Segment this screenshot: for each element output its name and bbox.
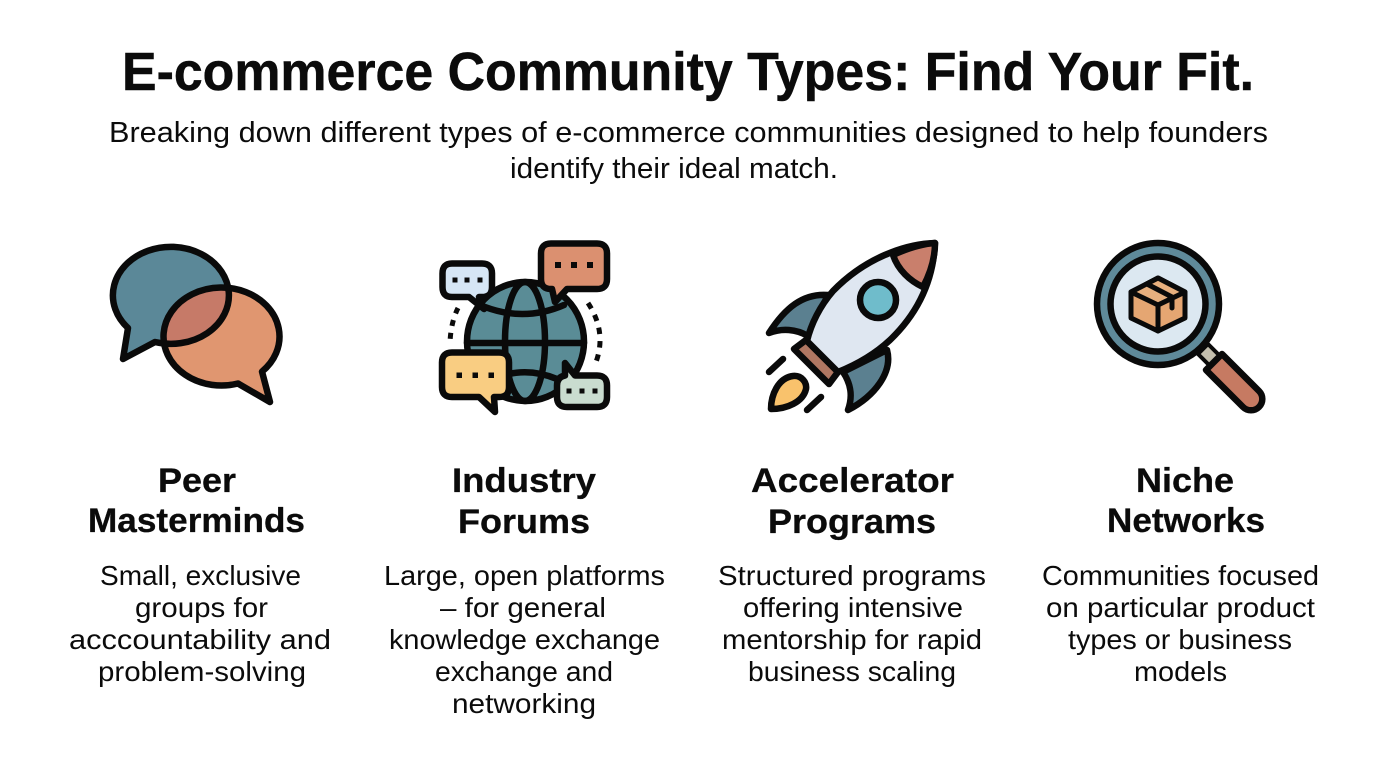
heading: peer masterminds: Masterminds <box>88 502 305 540</box>
panel: niche networks <box>1042 243 1319 687</box>
description: niche networks: models <box>1134 656 1227 687</box>
panel: industry forums <box>384 244 665 719</box>
heading: niche networks <box>1107 462 1265 540</box>
heading: accelerator programs <box>751 462 954 541</box>
heading: niche networks: Niche <box>1136 462 1234 500</box>
description: niche networks <box>1042 560 1319 687</box>
description: industry forums <box>384 560 665 719</box>
description: peer masterminds: Small, exclusive <box>100 560 301 591</box>
heading: peer masterminds: Peer <box>158 462 236 500</box>
description: accelerator programs: offering intensive <box>743 592 963 623</box>
panel: peer masterminds <box>69 247 331 687</box>
description: peer masterminds: groups for <box>135 592 268 623</box>
description: industry forums: knowledge exchange <box>389 624 660 655</box>
description: niche networks: types or business <box>1068 624 1292 655</box>
description: industry forums: – for general <box>440 592 606 623</box>
description: accelerator programs <box>718 560 986 687</box>
description: industry forums: networking <box>452 688 596 719</box>
heading: accelerator programs: Programs <box>768 503 936 541</box>
title: E-commerce Community Types: Find Your Fit. <box>122 42 1254 102</box>
subtitle: identify their ideal match. <box>510 153 838 185</box>
description: accelerator programs: business scaling <box>748 656 956 687</box>
subtitle: Breaking down different types of e-commerce communities designed to help founders <box>109 117 1268 149</box>
icon: rocket <box>769 243 935 410</box>
heading: industry forums: Forums <box>458 503 590 541</box>
panel: accelerator programs <box>718 243 986 687</box>
description: accelerator programs: Structured programs <box>718 560 986 591</box>
icon: magnifying glass with box <box>1097 243 1262 410</box>
heading: peer masterminds <box>88 462 305 540</box>
description: accelerator programs: mentorship for rapid <box>722 624 982 655</box>
subtitle <box>109 117 1268 185</box>
heading: niche networks: Networks <box>1107 502 1265 540</box>
icon: globe with chat bubbles <box>442 244 607 412</box>
heading: industry forums <box>452 462 596 541</box>
description: industry forums: exchange and <box>435 656 613 687</box>
description: industry forums: Large, open platforms <box>384 560 665 591</box>
heading: industry forums: Industry <box>452 462 596 500</box>
icon: overlapping speech bubbles <box>113 247 279 402</box>
description: niche networks: Communities focused <box>1042 560 1319 591</box>
description: peer masterminds: acccountability and <box>69 624 331 655</box>
description: peer masterminds: problem-solving <box>98 656 306 687</box>
description: niche networks: on particular product <box>1046 592 1315 623</box>
heading: accelerator programs: Accelerator <box>751 462 954 500</box>
description: peer masterminds <box>69 560 331 687</box>
